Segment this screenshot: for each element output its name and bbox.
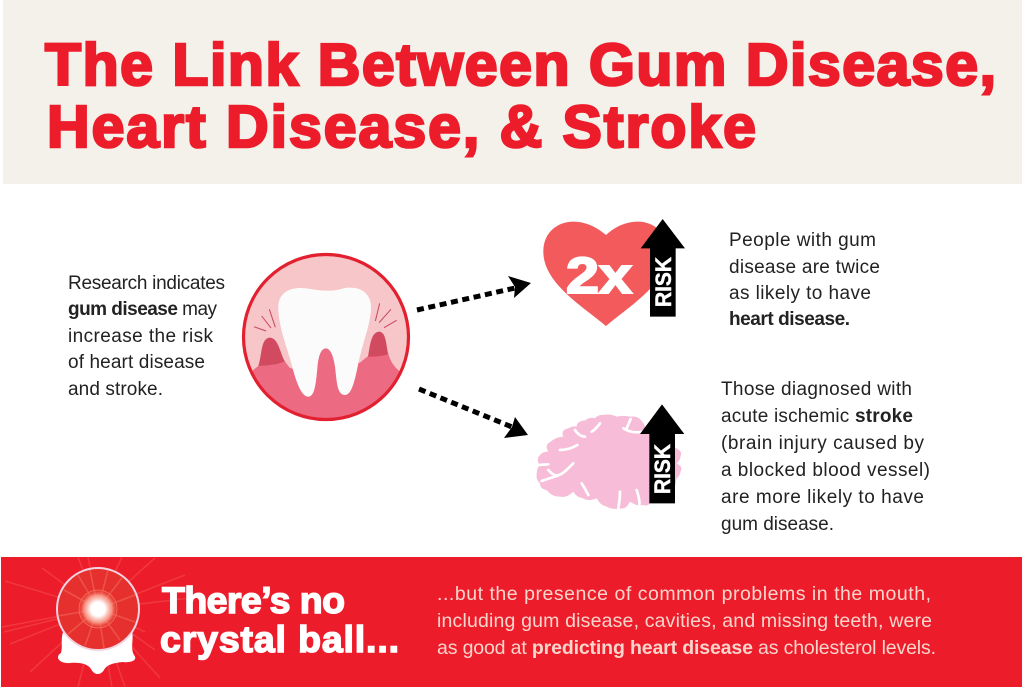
heading: no crystal ball [160, 579, 399, 660]
glass ball [57, 568, 139, 650]
text: research intro: Research indicates [68, 273, 225, 294]
tooth [278, 288, 371, 397]
text: stroke: a blocked blood vessel) [721, 460, 930, 481]
text: prediction: including gum disease, cavities, and missing teeth, were [437, 610, 932, 632]
text: prediction: as good at predicting heart disease as cholesterol levels. [437, 637, 936, 659]
icon: crystal ball [2, 557, 190, 687]
pain lines [254, 303, 397, 331]
text: heart disease: heart disease. [729, 309, 850, 330]
risk label: RISK [651, 257, 676, 307]
text: prediction [437, 583, 936, 659]
text: research intro [68, 273, 225, 400]
text: heart disease [729, 230, 880, 330]
text: stroke: (brain injury caused by [721, 433, 924, 454]
icon: brain with risk [537, 404, 684, 509]
text: research intro: increase the risk [68, 326, 214, 347]
text: research intro: and stroke. [68, 379, 163, 400]
text: stroke: Those diagnosed with [721, 379, 912, 400]
heading: no crystal ball: crystal ball... [160, 618, 399, 660]
text: stroke [721, 379, 930, 535]
icon: tooth with gum disease [243, 254, 410, 427]
title [45, 32, 996, 160]
gum [252, 348, 400, 418]
text: stroke: gum disease. [721, 514, 834, 535]
title: Heart Disease, & Stroke [47, 94, 756, 160]
icon: heart with 2x risk [543, 219, 685, 326]
left gum pocket [258, 338, 285, 366]
text: heart disease: disease are twice [729, 257, 880, 278]
2x label: 2x [566, 247, 632, 304]
risk label: RISK [650, 444, 675, 494]
text: heart disease: as likely to have [729, 283, 871, 304]
ball stand [58, 630, 135, 674]
text: stroke: acute ischemic stroke [721, 406, 913, 427]
footer band [1, 557, 1022, 687]
risk arrow [640, 404, 684, 503]
title: The Link Between Gum Disease, [45, 32, 996, 98]
right gum pocket [368, 332, 388, 357]
title banner [3, 0, 1022, 184]
arrow: gum to heart [417, 276, 531, 310]
arrow: gum to brain [419, 389, 528, 438]
text: research intro: of heart disease [68, 352, 205, 373]
text: stroke: are more likely to have [721, 487, 924, 508]
heart [543, 222, 668, 326]
text: prediction: ...but the presence of common problems in the mouth, [437, 583, 931, 605]
text: research intro: gum disease may [68, 299, 218, 320]
brain [537, 414, 681, 509]
heading: no crystal ball: There’s no [162, 579, 345, 621]
text: heart disease: People with gum [729, 230, 876, 251]
risk arrow [641, 219, 685, 317]
